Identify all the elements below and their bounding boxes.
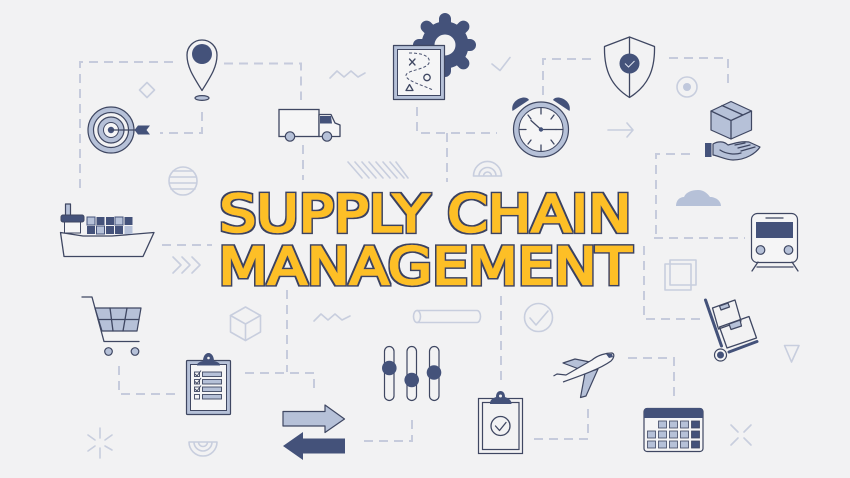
icon: exchange arrows bbox=[283, 405, 345, 460]
title line 2: MANAGEMENT bbox=[218, 238, 632, 297]
icon: target with dart bbox=[88, 107, 150, 153]
dashed connector network bbox=[80, 58, 745, 441]
icon: alarm clock bbox=[512, 98, 570, 157]
icon: cargo ship bbox=[60, 204, 154, 256]
icon: gear and route map bbox=[394, 19, 470, 100]
icon: shield with check bbox=[604, 37, 655, 98]
title line 1: SUPPLY CHAIN bbox=[220, 186, 632, 244]
title bbox=[218, 186, 632, 297]
icon: calendar bbox=[644, 408, 703, 452]
icon: sliders bbox=[382, 346, 441, 400]
icon: shopping cart bbox=[82, 297, 141, 355]
icon: hand truck with boxes bbox=[706, 300, 757, 361]
decorative background shapes bbox=[88, 58, 799, 458]
gear bbox=[419, 19, 470, 71]
icon: delivery truck bbox=[279, 110, 340, 141]
icon: airplane bbox=[554, 353, 614, 398]
icon: checklist clipboard bbox=[186, 353, 230, 414]
icon: approval clipboard bbox=[478, 391, 522, 454]
icon: location pin bbox=[187, 40, 217, 100]
route map bbox=[394, 46, 444, 100]
icon: box on open hand bbox=[705, 102, 760, 160]
icon: train bbox=[752, 214, 798, 271]
